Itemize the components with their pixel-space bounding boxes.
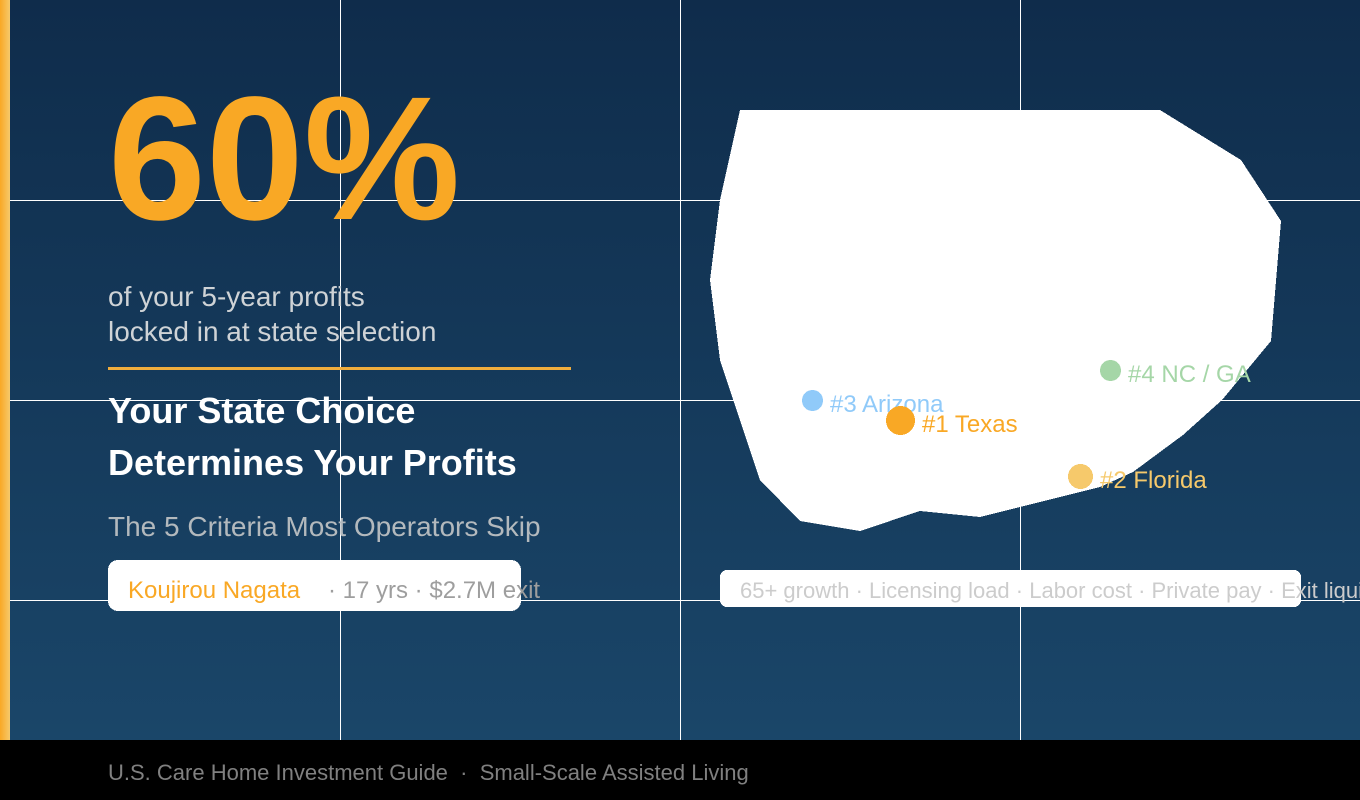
marker: #2 Florida: [1068, 464, 1207, 494]
statistic description: locked in at state selection: [108, 316, 436, 347]
marker: #3 Arizona: #3 Arizona: [830, 391, 943, 418]
divider rule: [108, 367, 571, 370]
footer bar: [0, 740, 1360, 800]
statistic description: [108, 281, 436, 347]
marker: #1 Texas: #1 Texas: [922, 411, 1018, 438]
accent bar: [0, 0, 10, 740]
big statistic: 60%: [108, 61, 460, 257]
author chip: · 17 yrs · $2.7M exit: [328, 577, 540, 604]
author chip: Koujirou Nagata: [128, 577, 300, 604]
marker: #4 NC / GA: #4 NC / GA: [1128, 361, 1251, 388]
subtitle: The 5 Criteria Most Operators Skip: [108, 511, 541, 542]
criteria chip: [720, 570, 1360, 607]
marker: #2 Florida: #2 Florida: [1100, 467, 1207, 494]
marker: #1 Texas: [886, 406, 1018, 438]
footer bar: U.S. Care Home Investment Guide · Small-Scale Assisted Living: [108, 760, 749, 785]
author chip: [108, 560, 540, 611]
headline: Your State Choice: [108, 390, 415, 431]
headline: [108, 390, 517, 483]
statistic description: of your 5-year profits: [108, 281, 365, 312]
headline: Determines Your Profits: [108, 442, 517, 483]
